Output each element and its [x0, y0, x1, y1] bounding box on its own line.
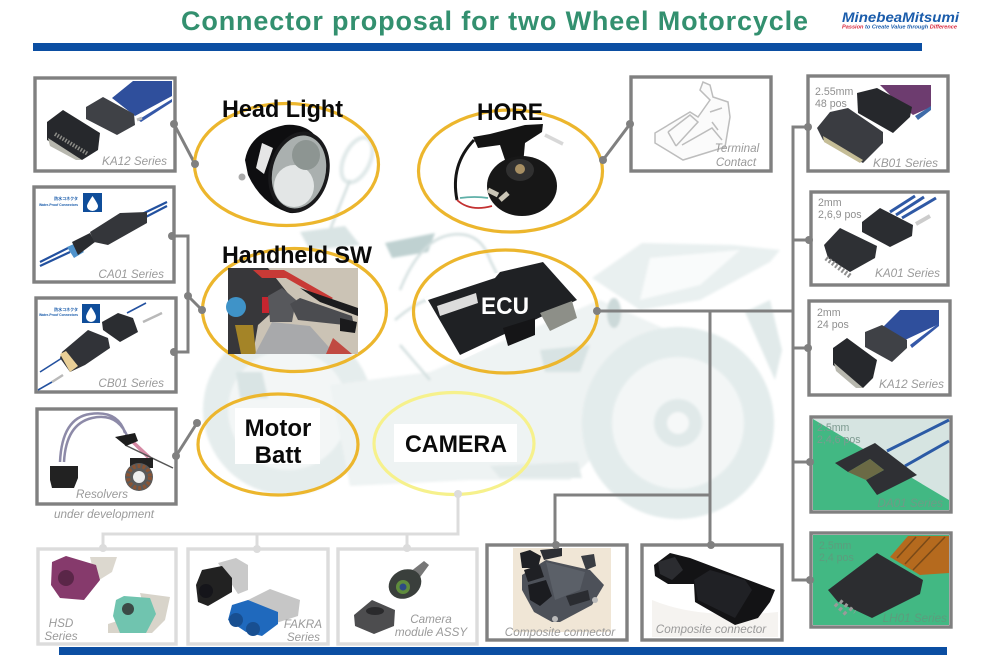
- panel: KA12 series right: [809, 301, 950, 395]
- panel: KA01 series: 2,6,9 pos: [818, 209, 862, 221]
- panel: HSD series: [38, 549, 176, 644]
- ring: Motor Batt: [198, 394, 358, 495]
- icon: water-proof badge: [39, 304, 100, 323]
- icon: composite connector: [520, 548, 604, 622]
- icon: terminal line drawing: [655, 82, 730, 160]
- icon: water-proof badge: Water-Proof Connectors: [39, 313, 78, 317]
- panel: KB01 series: 48 pos: [815, 98, 847, 110]
- icon: water-proof badge: Water-Proof Connectors: [39, 203, 78, 207]
- label: Camera: [410, 613, 452, 626]
- heading: Motor: [245, 415, 311, 442]
- logo: [842, 9, 960, 30]
- spec: 2.5mm: [819, 540, 852, 552]
- ring: Motor Batt: Batt: [255, 442, 301, 469]
- icon: CA01 connector: [40, 202, 167, 266]
- icon: FAKRA connectors: [196, 558, 300, 636]
- bottom rule: [59, 647, 947, 655]
- panel: Terminal Contact: Contact: [716, 156, 757, 169]
- heading: Handheld SW: [222, 242, 372, 269]
- panel: DA01 series: 2,4,6 pos: [817, 434, 861, 446]
- connector lines: camera: [103, 494, 458, 549]
- icon: camera modules: [354, 561, 429, 634]
- connector dots: camera: [99, 490, 462, 553]
- ring: Head Light: [194, 96, 378, 226]
- panel: FAKRA series: [188, 549, 328, 644]
- panel: KB01 series: [808, 76, 948, 171]
- motorcycle background: [203, 133, 782, 519]
- label: KA12 Series: [879, 378, 944, 391]
- photo: ECU: [424, 258, 585, 360]
- connector lines: dark: [172, 124, 810, 580]
- label: CB01 Series: [98, 377, 164, 390]
- label: LH01 Series: [883, 612, 947, 625]
- panel: HSD series: Series: [44, 630, 78, 643]
- panel: Composite connector 2: [642, 545, 782, 640]
- photo: horn: [455, 124, 563, 216]
- heading: ECU: [481, 293, 529, 320]
- label: KA12 Series: [102, 155, 167, 168]
- photo backdrop: [652, 600, 778, 637]
- panel: Terminal Contact: [631, 77, 771, 171]
- photo: handlebar switch: [226, 268, 358, 354]
- panel: Resolvers: [37, 409, 176, 504]
- panel: KA12 series left: [35, 78, 175, 171]
- panel: FAKRA series: Series: [287, 631, 320, 644]
- label: HSD: [49, 617, 74, 630]
- label backing: [235, 408, 320, 464]
- icon: composite connector: [654, 553, 775, 625]
- connector dots: dark: [168, 120, 814, 584]
- ring: Handheld SW: [202, 242, 386, 372]
- heading: CAMERA: [405, 431, 507, 458]
- spec: 2mm: [817, 307, 841, 319]
- panel: CA01 series: [34, 187, 174, 282]
- title: Connector proposal for two Wheel Motorcycle: [181, 6, 808, 36]
- top rule: [33, 43, 922, 51]
- green backdrop: [813, 419, 949, 500]
- panel: Camera module ASSY: module ASSY: [395, 626, 468, 639]
- logo: MinebeaMitsumi: [842, 9, 960, 25]
- spec: 2.5mm: [817, 422, 850, 434]
- ring: CAMERA: [374, 392, 534, 494]
- label: KB01 Series: [873, 157, 938, 170]
- panel: CB01 series: [36, 298, 176, 392]
- note: under development: under development: [54, 508, 155, 521]
- label: Resolvers: [76, 488, 128, 501]
- spec: 2.55mm: [815, 86, 853, 98]
- label: KA01 Series: [875, 267, 940, 280]
- icon: resolver harness: [50, 413, 173, 491]
- icon: KB01 connector pair: [817, 85, 931, 163]
- icon: water-proof badge: 防水コネクタ: [54, 195, 78, 201]
- ring: HORE: [418, 99, 602, 232]
- icon: KA12 connector pair: [833, 310, 939, 388]
- label: Composite connector: [505, 626, 616, 639]
- panel: DA01 series: [811, 417, 951, 512]
- label: CA01 Series: [98, 268, 164, 281]
- panel: LH01 series: 2,4 pos: [819, 552, 854, 564]
- panel: KA01 series: [811, 192, 948, 285]
- label: FAKRA: [284, 618, 322, 631]
- label: Terminal: [715, 142, 760, 155]
- icon: DA01 connector: [835, 420, 949, 495]
- panel: Camera module ASSY: [338, 549, 477, 644]
- icon: KA12 connector pair: [47, 81, 172, 160]
- label backing: [394, 424, 517, 462]
- photo backdrop: [513, 548, 611, 632]
- panel: LH01 series: [811, 533, 951, 627]
- spec: 2mm: [818, 197, 842, 209]
- icon: LH01 connector: [828, 536, 949, 618]
- icon: KA01 connector pair: [824, 196, 936, 276]
- photo: head light: [238, 125, 338, 219]
- panel: Composite connector 1: [487, 545, 627, 640]
- panel: KA12 series right: 24 pos: [817, 319, 849, 331]
- green backdrop: [813, 535, 949, 625]
- label: Composite connector: [656, 623, 767, 636]
- logo: Passion to Create Value through Difference: [842, 24, 957, 30]
- icon: water-proof badge: [39, 193, 102, 212]
- label: DA01 Series: [877, 497, 943, 510]
- icon: HSD connectors: [51, 556, 170, 633]
- heading: HORE: [477, 99, 543, 126]
- icon: CB01 connector pair: [38, 303, 162, 390]
- ring: ECU: [414, 250, 598, 373]
- icon: water-proof badge: 防水コネクタ: [54, 306, 78, 312]
- heading: Head Light: [222, 96, 343, 123]
